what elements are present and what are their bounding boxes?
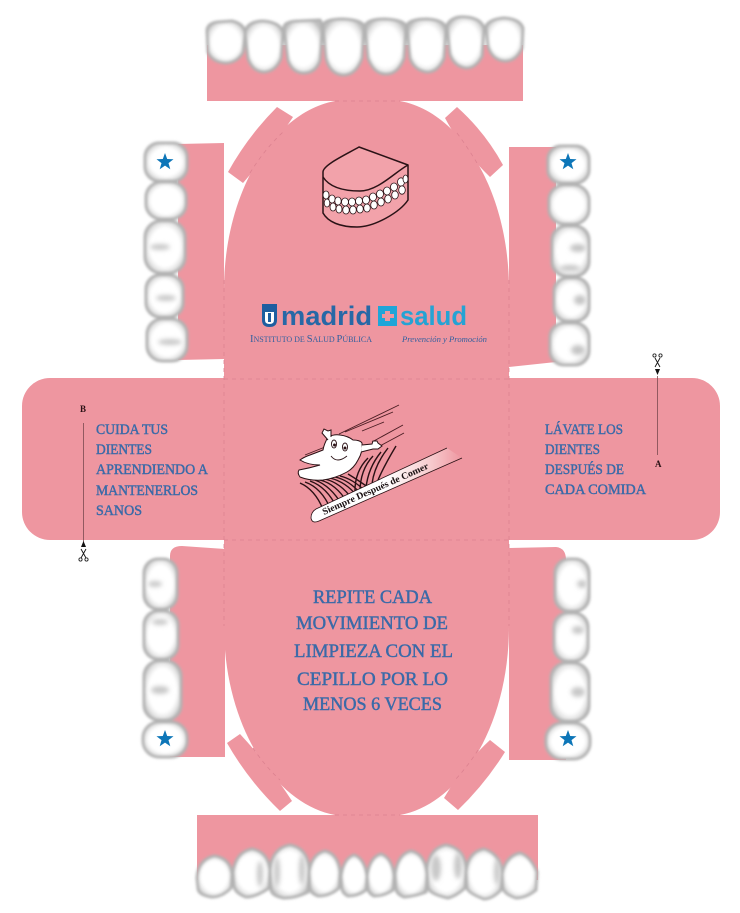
text: madrid: madrid [281,301,372,331]
icon: denture [323,147,408,227]
right upper teeth [548,146,589,365]
illustration: running tooth mascot [298,405,462,522]
left upper tooth shading [150,244,182,345]
icon: star lower right [560,730,576,746]
text: salud: salud [400,301,467,331]
text: lavate los dientes: DESPUÉS DE [545,461,624,478]
text: cuida tus dientes: CUIDA TUS [96,422,168,438]
left lower teeth [143,559,187,757]
icon: star lower left [156,730,174,746]
text: lavate los dientes: DIENTES [545,442,600,458]
panel: upper left gum flap [178,143,224,360]
text: repite cada movimiento: CEPILLO POR LO [297,669,448,690]
icon: star upper left [156,153,174,169]
speed lines [305,405,404,455]
mascot body [298,435,362,480]
grass [300,446,396,512]
text: cuida tus dientes [96,422,209,519]
label B: B [80,404,86,414]
right lower teeth [546,559,590,759]
right upper tooth shading [560,244,586,355]
text: instituto: INSTITUTO DE SALUD PÚBLICA [250,334,372,345]
text: slogan: Siempre Después de Comer [321,462,431,518]
left lower tooth shading [148,581,169,694]
panel: upper right gum flap [509,147,556,367]
denture upper teeth [323,175,408,206]
top row of teeth [207,17,523,75]
denture lower teeth [324,186,405,214]
left upper teeth [145,143,187,361]
icon: cross box [378,306,397,326]
cut mark A with scissors [653,354,662,469]
fold lines [224,101,509,815]
text: cuida tus dientes: APRENDIENDO A [96,462,209,478]
text: lavate los dientes: LÁVATE LOS [545,421,623,438]
panel: lower left gum flap [170,546,225,757]
right lower tooth shading [571,580,587,697]
panel: horizontal band [22,378,720,540]
icon: star upper right [560,153,576,169]
cut mark B with scissors [79,404,88,561]
text: lavate los dientes: CADA COMIDA [545,482,647,498]
bottom tooth shading [257,853,500,887]
panel: central oval body [224,101,509,815]
panel: top gum strip [207,45,523,101]
text: lavate los dientes [545,421,647,498]
text: cuida tus dientes: MANTENERLOS [96,483,198,499]
panel: bottom gum strip [197,815,538,880]
text: repite cada movimiento: REPITE CADA [313,587,432,608]
text: cuida tus dientes: DIENTES [96,442,152,458]
text: repite cada movimiento: MOVIMIENTO DE [296,613,448,634]
panel: glue tabs [227,107,505,811]
mascot face [331,440,348,460]
label A: A [655,459,662,469]
mascot arms [322,429,382,452]
text: repite cada movimiento: MENOS 6 VECES [303,694,442,715]
slogan banner [311,448,462,522]
text: repite cada movimiento [294,587,453,715]
text: prevencion: Prevención y Promoción [401,334,487,344]
text: repite cada movimiento: LIMPIEZA CON EL [294,641,453,662]
icon: city crest [262,304,277,327]
panel: lower right gum flap [509,547,566,760]
logo: madrid salud [250,301,487,345]
text: cuida tus dientes: SANOS [96,503,142,519]
bottom row of teeth [197,845,537,899]
